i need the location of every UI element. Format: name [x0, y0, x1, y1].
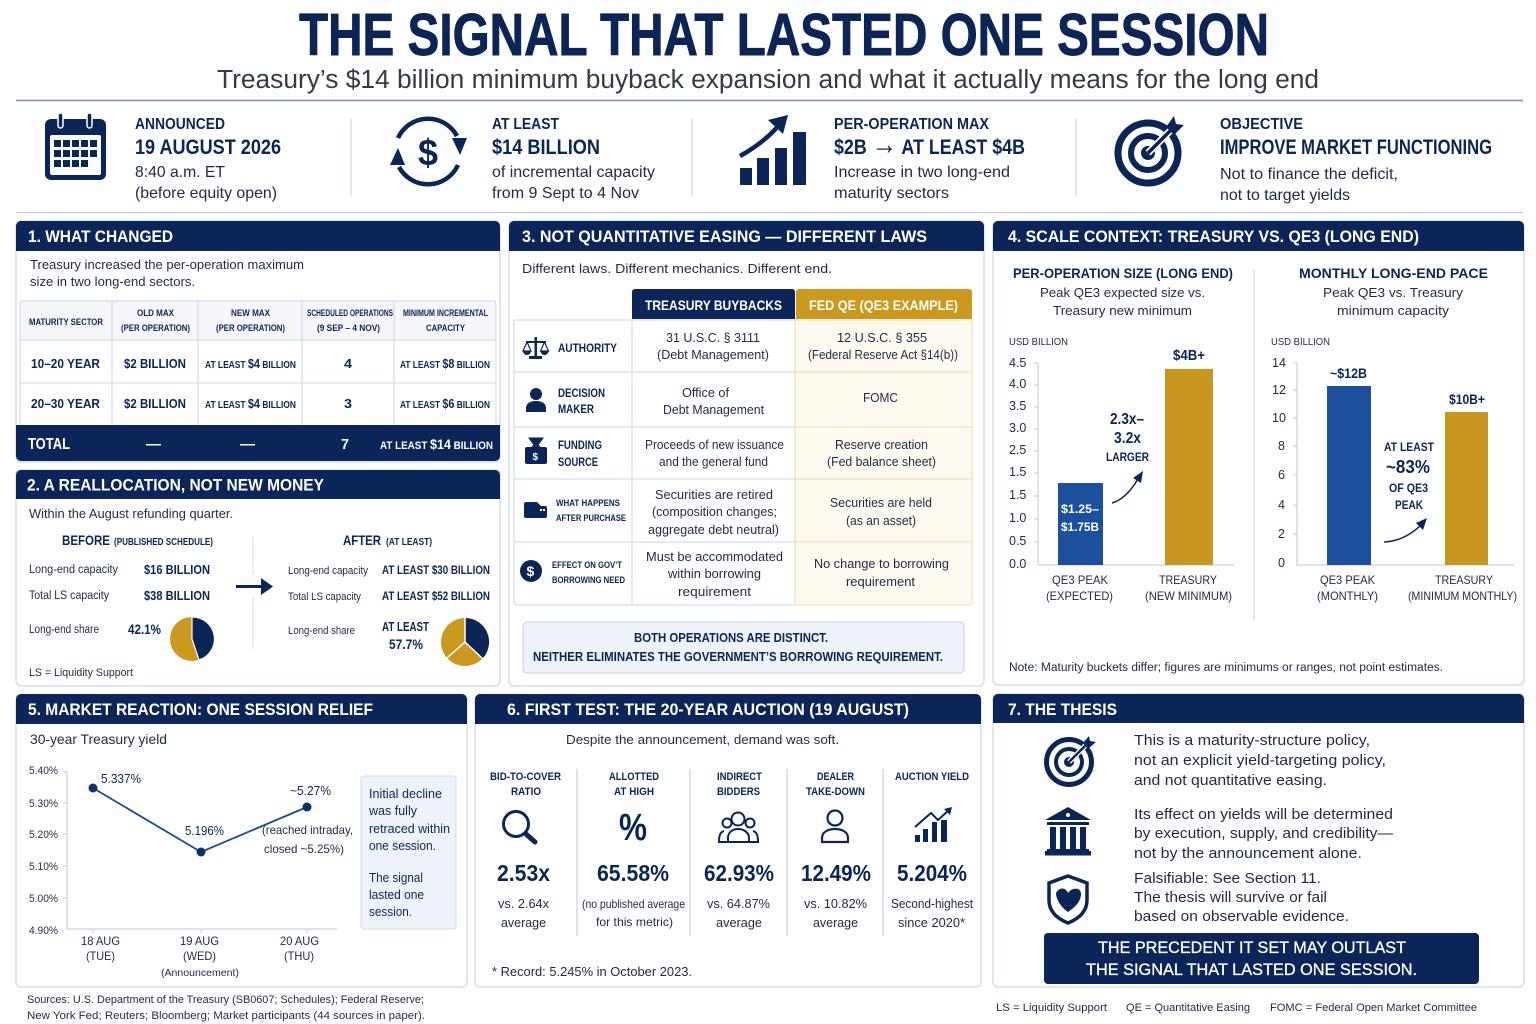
thesis point 3 [1049, 870, 1349, 925]
comparison table: (Federal Reserve Act §14(b)) [808, 347, 958, 362]
panel 6: first test [475, 694, 981, 987]
metric: indirect bidders: BIDDERS [717, 786, 760, 798]
metric: bid-to-cover: 2.53x [497, 860, 550, 886]
line chart: 30-year yield: (THU) [284, 949, 314, 963]
comparison table: 31 U.S.C. § 3111 [666, 330, 760, 345]
icon: rising bars with arrow [740, 115, 806, 185]
chart: per-operation size: 1.0 [1009, 511, 1026, 525]
chart: per-operation size: 3.5 [1009, 399, 1026, 413]
row: what happens after purchase: AFTER PURCHASE [556, 513, 626, 524]
table: per-operation changes: (PER OPERATION) [216, 323, 285, 334]
thesis point 2: Its effect on yields will be determined [1134, 806, 1393, 823]
chart: monthly long-end pace: OF QE3 [1389, 481, 1428, 495]
icon: calendar [45, 113, 106, 180]
panel 4: scale context: 4. SCALE CONTEXT: TREASURY VS. QE3 (LONG END) [1008, 227, 1419, 246]
metric: dealer take-down: TAKE-DOWN [806, 786, 865, 798]
comparison table: FED QE (QE3 EXAMPLE) [809, 297, 958, 313]
comparison table: Reserve creation [835, 437, 928, 452]
chart: per-operation size: Treasury new minimum [1053, 303, 1192, 318]
comparison table: No change to borrowing [814, 556, 949, 571]
row: effect on borrowing need [520, 560, 625, 586]
metric: allotted at high: ALLOTTED [609, 771, 659, 783]
chart: monthly long-end pace: MONTHLY LONG-END PACE [1299, 265, 1488, 281]
line chart: 30-year yield: 5.40% [29, 765, 58, 777]
metric: allotted at high: for this metric) [596, 915, 673, 929]
abbreviation legend: QE = Quantitative Easing [1126, 1002, 1250, 1014]
table: per-operation changes: OLD MAX [137, 308, 175, 319]
row: funding source: FUNDING [558, 438, 602, 452]
table: per-operation changes: AT LEAST $6 BILLION [400, 396, 490, 411]
panel 5: market reaction [16, 694, 467, 987]
chart: per-operation size: 3.0 [1009, 421, 1026, 435]
chart: per-operation size: 2.3x– [1110, 411, 1144, 428]
comparison table: Debt Management [663, 402, 764, 417]
pie: before 42.1 percent [170, 617, 214, 661]
icon: target [1046, 736, 1096, 784]
table: per-operation changes: SCHEDULED OPERATIONS [307, 308, 393, 319]
chart: per-operation size: (NEW MINIMUM) [1145, 589, 1232, 603]
table: per-operation changes [20, 301, 496, 425]
banner: precedent [1044, 933, 1479, 984]
line chart: 30-year yield: closed ~5.25%) [264, 842, 344, 856]
chart: monthly long-end pace: (MINIMUM MONTHLY) [1408, 589, 1517, 603]
metric: indirect bidders: INDIRECT [717, 771, 762, 783]
key fact: objective [1118, 116, 1492, 204]
comparison table: 12 U.S.C. § 355 [837, 330, 927, 345]
key fact: objective: not to target yields [1220, 187, 1350, 204]
row: what happens after purchase [524, 498, 626, 524]
icon: small chart with arrow [915, 807, 952, 842]
arrow: 83 percent [1384, 518, 1427, 542]
before column: 42.1% [128, 622, 161, 637]
sources: Sources: U.S. Department of the Treasury (SB0607; Schedules); Federal Reserve; [27, 994, 424, 1006]
row: funding source: SOURCE [558, 455, 598, 469]
after column: AT LEAST $52 BILLION [382, 589, 490, 603]
panel 2: reallocation: 2. A REALLOCATION, NOT NEW MONEY [27, 476, 325, 494]
after column: AFTER [343, 533, 381, 548]
icon: folder wallet [524, 502, 547, 518]
chart: per-operation size: 4.0 [1009, 377, 1026, 391]
thesis point 1 [1046, 732, 1386, 789]
metric: auction yield: since 2020* [898, 915, 965, 930]
chart: monthly long-end pace: ~$12B [1330, 366, 1367, 381]
pie: after 57.7 percent [441, 618, 489, 666]
metric: bid-to-cover: RATIO [511, 786, 541, 798]
row: what happens after purchase: WHAT HAPPENS [556, 498, 620, 509]
after column: Long-end capacity [288, 565, 368, 577]
comparison table: requirement [846, 574, 915, 589]
row: funding source [525, 438, 602, 469]
icon: scales [523, 337, 548, 359]
arrow: before to after [236, 578, 273, 595]
panel 1: what changed: Treasury increased the per-operation maximum [30, 257, 304, 272]
row: decision maker: DECISION [558, 386, 605, 400]
key fact: announced [45, 113, 281, 202]
chart: per-operation size: 4.5 [1009, 356, 1026, 370]
row: authority: AUTHORITY [558, 341, 617, 355]
comparison table: Must be accommodated [646, 549, 783, 564]
icon: bank [1045, 807, 1091, 856]
metric: indirect bidders: 62.93% [704, 860, 774, 886]
metric: dealer take-down: average [813, 915, 858, 930]
icon: dollar cycle: $ [418, 132, 438, 173]
line chart: 30-year yield: (reached intraday, [262, 823, 353, 837]
metric: auction yield [891, 771, 973, 930]
panel 2: reallocation: Within the August refunding quarter. [29, 506, 233, 521]
metric: auction yield: AUCTION YIELD [895, 771, 969, 783]
comparison table [514, 289, 972, 605]
comparison table: within borrowing [667, 566, 761, 581]
table: per-operation changes: MATURITY SECTOR [29, 317, 103, 328]
callout: initial decline: Initial decline [369, 787, 442, 801]
line chart: 30-year yield: (TUE) [86, 949, 115, 963]
metric: bid-to-cover [490, 771, 561, 930]
panel 4: scale context: Note: Maturity buckets differ; figures are minimums or ranges, not point estimates. [1009, 662, 1443, 674]
chart: monthly long-end pace: 2 [1278, 527, 1285, 541]
icon: magnifier [504, 812, 535, 842]
abbreviation legend: LS = Liquidity Support [996, 1002, 1107, 1014]
panel 6: first test: Despite the announcement, demand was soft. [566, 732, 839, 747]
after column [288, 533, 490, 666]
line chart: 30-year yield: 5.30% [29, 798, 58, 810]
metric: allotted at high [582, 771, 685, 929]
line chart: 30-year yield: 4.90% [29, 925, 58, 937]
chart: per-operation size: 0.5 [1009, 534, 1026, 548]
metric: allotted at high: (no published average [582, 897, 685, 911]
icon: dollar coin: $ [526, 563, 534, 579]
line chart: 30-year yield: 5.196% [185, 824, 224, 838]
callout: initial decline: The signal [369, 871, 423, 885]
table: per-operation changes: (PER OPERATION) [121, 323, 190, 334]
panel 3: not QE: Different laws. Different mechanics. Different end. [522, 261, 832, 276]
chart: monthly long-end pace: 10 [1272, 411, 1286, 425]
chart: per-operation size: 2.5 [1009, 443, 1026, 457]
chart: monthly long-end pace: minimum capacity [1337, 303, 1450, 318]
total row: — [240, 436, 255, 453]
thesis point 2 [1045, 806, 1393, 862]
thesis point 1: and not quantitative easing. [1134, 772, 1327, 789]
total row: AT LEAST $14 BILLION [380, 436, 493, 452]
line chart: 30-year yield: 20 AUG [280, 934, 319, 948]
panel 3: not QE: 3. NOT QUANTITATIVE EASING — DIFFERENT LAWS [522, 227, 927, 246]
line chart: 30-year yield: 19 AUG [180, 934, 219, 948]
before column: (PUBLISHED SCHEDULE) [114, 537, 213, 548]
thesis point 1: This is a maturity-structure policy, [1134, 732, 1370, 749]
icon: shield with check [1049, 876, 1087, 923]
comparison table: (Debt Management) [657, 347, 769, 362]
table: per-operation changes: $2 BILLION [124, 396, 186, 411]
chart: per-operation size [1009, 265, 1234, 603]
key fact: announced: 8:40 a.m. ET [135, 164, 225, 181]
line chart: 30-year yield: (WED) [183, 949, 216, 963]
metric: indirect bidders: vs. 64.87% [707, 896, 770, 911]
chart: monthly long-end pace: (MONTHLY) [1317, 589, 1378, 603]
key fact: announced: (before equity open) [135, 185, 277, 202]
panel 5: market reaction: 5. MARKET REACTION: ONE SESSION RELIEF [28, 700, 373, 719]
panel 7: the thesis [993, 694, 1524, 987]
chart: per-operation size: 3.2x [1114, 430, 1141, 447]
key fact: at least 14 billion [390, 116, 655, 202]
callout: both operations distinct: NEITHER ELIMINATES THE GOVERNMENT’S BORROWING REQUIREMENT. [533, 650, 943, 664]
metric: auction yield: Second-highest [891, 896, 973, 911]
chart: per-operation size: 0.0 [1009, 557, 1026, 571]
key fact: per-operation max: maturity sectors [834, 185, 949, 202]
subtitle: Treasury’s $14 billion minimum buyback expansion and what it actually means for the long end [217, 66, 1319, 94]
before column: $38 BILLION [144, 589, 210, 603]
table: per-operation changes: 4 [344, 356, 353, 371]
table: per-operation changes: CAPACITY [426, 323, 466, 334]
metric: bid-to-cover: BID-TO-COVER [490, 771, 561, 783]
thesis point 1: not an explicit yield-targeting policy, [1134, 752, 1386, 769]
row: decision maker [526, 386, 605, 416]
panel 2: reallocation [16, 470, 500, 686]
key fact: at least 14 billion: from 9 Sept to 4 Nov [492, 185, 639, 202]
callout: initial decline: retraced within [369, 822, 450, 836]
chart: monthly long-end pace: Peak QE3 vs. Treasury [1323, 285, 1464, 300]
line chart: 30-year yield: 5.10% [29, 861, 58, 873]
chart: monthly long-end pace: TREASURY [1435, 573, 1493, 587]
panel 3: not QE [509, 221, 984, 686]
row: effect on borrowing need: EFFECT ON GOV’T [552, 560, 622, 571]
icon: percent: % [619, 807, 647, 849]
table: per-operation changes: (9 SEP – 4 NOV) [317, 323, 380, 334]
panel 7: the thesis: 7. THE THESIS [1008, 700, 1117, 719]
comparison table: Securities are retired [655, 487, 773, 502]
comparison table: TREASURY BUYBACKS [645, 297, 782, 313]
after column: AT LEAST $30 BILLION [382, 563, 490, 577]
key fact: announced: 19 AUGUST 2026 [135, 136, 281, 159]
table: per-operation changes: 3 [344, 396, 352, 411]
key fact: announced: ANNOUNCED [135, 116, 225, 133]
before column: Long-end share [29, 624, 99, 636]
panel 4: scale context [993, 221, 1524, 685]
chart: monthly long-end pace: USD BILLION [1271, 336, 1330, 348]
banner: precedent: THE PRECEDENT IT SET MAY OUTLAST [1098, 938, 1406, 957]
panel 1: what changed [16, 221, 500, 462]
line chart: 30-year yield: ~5.27% [290, 784, 331, 798]
sources: New York Fed; Reuters; Bloomberg; Market participants (44 sources in paper). [27, 1010, 425, 1022]
total row: TOTAL [28, 436, 70, 453]
after column: AT LEAST [382, 620, 429, 634]
chart: monthly long-end pace: ~83% [1386, 457, 1430, 477]
callout: initial decline: lasted one [369, 888, 424, 902]
key fact: objective: Not to finance the deficit, [1220, 166, 1398, 183]
chart: per-operation size: TREASURY [1159, 573, 1217, 587]
table: per-operation changes: AT LEAST $4 BILLION [205, 396, 296, 411]
line chart: 30-year yield: (Announcement) [161, 967, 239, 979]
banner: precedent: THE SIGNAL THAT LASTED ONE SESSION. [1086, 960, 1417, 979]
table: per-operation changes: 20–30 YEAR [31, 396, 101, 411]
chart: monthly long-end pace: 8 [1278, 439, 1285, 453]
metric: dealer take-down [801, 771, 871, 930]
icon: person [526, 388, 546, 412]
key fact: per-operation max: Increase in two long-end [834, 164, 1010, 181]
chart: monthly long-end pace: PEAK [1395, 498, 1423, 512]
comparison table: (composition changes; [652, 504, 777, 519]
panel 5: market reaction: 30-year Treasury yield [30, 731, 167, 747]
metric: allotted at high: AT HIGH [614, 786, 654, 798]
chart: monthly long-end pace: QE3 PEAK [1320, 573, 1375, 587]
metric: allotted at high: 65.58% [597, 860, 669, 886]
key fact: per-operation max: PER-OPERATION MAX [834, 116, 989, 133]
table: per-operation changes: NEW MAX [231, 308, 271, 319]
chart: monthly long-end pace: 4 [1278, 498, 1285, 512]
comparison table: Securities are held [830, 495, 932, 510]
key fact: per-operation max: $2B → AT LEAST $4B [834, 128, 1025, 161]
after column: (AT LEAST) [386, 537, 432, 548]
before column: BEFORE [62, 533, 110, 548]
table: per-operation changes: AT LEAST $4 BILLION [205, 356, 296, 371]
icon: money bag: $ [532, 452, 538, 463]
abbreviation legend [996, 1002, 1477, 1014]
panel 6: first test: 6. FIRST TEST: THE 20-YEAR AUCTION (19 AUGUST) [507, 700, 909, 719]
row: decision maker: MAKER [558, 402, 594, 416]
key fact: at least 14 billion: of incremental capacity [492, 164, 655, 181]
chart: per-operation size: 1.5 [1009, 465, 1026, 479]
thesis point 3: The thesis will survive or fail [1134, 889, 1327, 906]
total row: 7 [341, 436, 349, 453]
callout: both operations distinct [523, 622, 964, 673]
thesis point 3: based on observable evidence. [1134, 908, 1349, 925]
table: per-operation changes: 10–20 YEAR [31, 356, 101, 371]
metric: indirect bidders [704, 771, 774, 930]
before column: $16 BILLION [144, 563, 210, 577]
total row: — [146, 436, 161, 453]
comparison table: aggregate debt neutral) [648, 522, 779, 537]
chart: per-operation size: Peak QE3 expected size vs. [1040, 285, 1205, 300]
icon: dollar cycle [390, 119, 467, 184]
callout: both operations distinct: BOTH OPERATIONS ARE DISTINCT. [634, 631, 828, 645]
chart: monthly long-end pace: $10B+ [1449, 392, 1485, 407]
icon: target [1118, 116, 1184, 183]
chart: per-operation size: (EXPECTED) [1046, 589, 1113, 603]
comparison table: requirement [678, 584, 751, 599]
callout: initial decline: session. [369, 905, 412, 919]
key fact: at least 14 billion: AT LEAST [492, 116, 559, 133]
chart: per-operation size: LARGER [1106, 450, 1149, 464]
before column: Long-end capacity [29, 564, 118, 576]
panel 1: what changed: 1. WHAT CHANGED [28, 227, 173, 246]
before column [29, 533, 214, 661]
comparison table: and the general fund [659, 454, 768, 469]
metric: dealer take-down: vs. 10.82% [804, 896, 867, 911]
chart: monthly long-end pace [1271, 265, 1517, 603]
thesis point 2: by execution, supply, and credibility— [1134, 825, 1393, 842]
arrow: 2.3x larger [1112, 471, 1143, 503]
metric: indirect bidders: average [716, 915, 762, 930]
total row [16, 425, 500, 461]
line chart: 30-year yield: 18 AUG [81, 934, 120, 948]
key fact: per-operation max [740, 115, 1025, 202]
after column: Long-end share [288, 625, 355, 637]
comparison table: Proceeds of new issuance [645, 437, 784, 452]
row: authority [523, 337, 617, 359]
title: THE SIGNAL THAT LASTED ONE SESSION [299, 2, 1269, 68]
chart: per-operation size: 1.5 [1009, 488, 1026, 502]
before column: Total LS capacity [29, 590, 109, 602]
chart: per-operation size: $4B+ [1173, 347, 1205, 364]
table: per-operation changes: AT LEAST $8 BILLION [400, 356, 490, 371]
row: effect on borrowing need: BORROWING NEED [552, 575, 625, 586]
chart: per-operation size: $1.25– [1061, 502, 1099, 516]
metric: bid-to-cover: vs. 2.64x [498, 896, 549, 911]
key fact: objective: OBJECTIVE [1220, 116, 1303, 133]
chart: monthly long-end pace: 6 [1278, 468, 1285, 482]
table: per-operation changes: MINIMUM INCREMENTAL [403, 308, 488, 319]
sources [27, 994, 425, 1022]
abbreviation legend: FOMC = Federal Open Market Committee [1270, 1002, 1477, 1014]
metric: bid-to-cover: average [501, 915, 546, 930]
metric: auction yield: 5.204% [897, 860, 967, 886]
chart: per-operation size: PER-OPERATION SIZE (LONG END) [1013, 265, 1233, 281]
comparison table: (Fed balance sheet) [827, 454, 936, 469]
thesis point 3: Falsifiable: See Section 11. [1134, 870, 1321, 887]
panel 6: first test: * Record: 5.245% in October 2023. [492, 965, 692, 979]
thesis point 2: not by the announcement alone. [1134, 845, 1362, 862]
metric: dealer take-down: 12.49% [801, 860, 871, 886]
comparison table: (as an asset) [846, 513, 916, 528]
comparison table: Office of [682, 385, 729, 400]
chart: per-operation size: QE3 PEAK [1052, 573, 1108, 587]
chart: monthly long-end pace: AT LEAST [1384, 440, 1435, 454]
chart: per-operation size: USD BILLION [1009, 336, 1068, 348]
chart: per-operation size: $1.75B [1061, 520, 1099, 534]
chart: monthly long-end pace: 12 [1272, 383, 1286, 397]
metric: dealer take-down: DEALER [817, 771, 854, 783]
key fact: at least 14 billion: $14 BILLION [492, 136, 600, 159]
line chart: 30-year yield: 5.20% [29, 829, 58, 841]
icon: single person [822, 810, 848, 842]
chart: monthly long-end pace: 14 [1272, 356, 1286, 370]
after column: 57.7% [389, 637, 423, 652]
icon: group [719, 812, 758, 842]
line chart: 30-year yield: 5.337% [101, 772, 141, 786]
comparison table: FOMC [863, 390, 898, 405]
line chart: 30-year yield: 5.00% [29, 893, 58, 905]
callout: initial decline: one session. [369, 839, 436, 853]
line chart: 30-year yield [29, 765, 353, 979]
panel 1: what changed: size in two long-end sectors. [30, 274, 195, 289]
chart: monthly long-end pace: 0 [1278, 556, 1285, 570]
callout: initial decline: was fully [368, 804, 418, 818]
after column: Total LS capacity [288, 591, 361, 603]
panel 2: reallocation: LS = Liquidity Support [29, 667, 133, 679]
callout: initial decline [361, 776, 456, 929]
table: per-operation changes: $2 BILLION [124, 356, 186, 371]
